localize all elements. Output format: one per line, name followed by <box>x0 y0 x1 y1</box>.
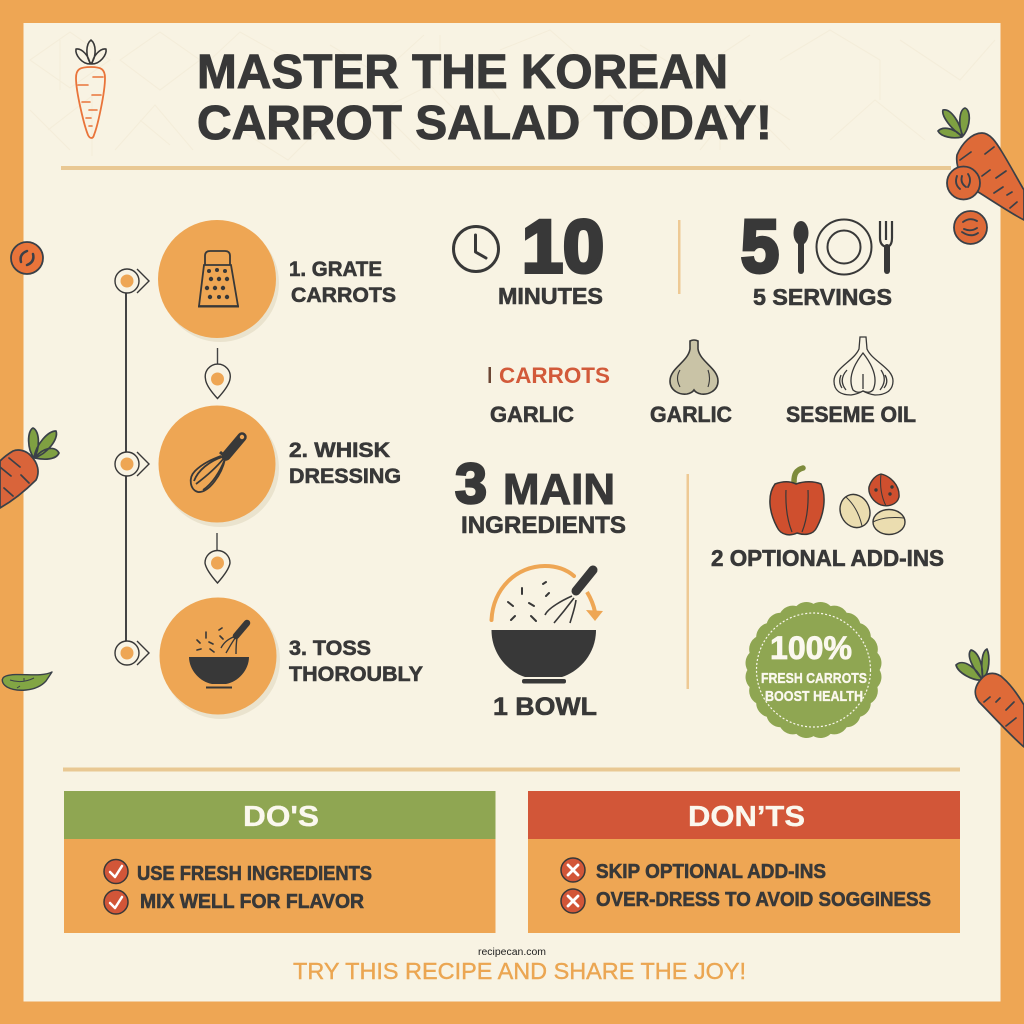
timeline line <box>125 292 127 642</box>
stat: 5 servings: 5 SERVINGS <box>753 284 892 310</box>
ingredient: filled garlic: GARLIC <box>650 402 732 427</box>
badge: 100% fresh carrots <box>746 602 881 738</box>
source credit: recipecan.com <box>478 947 546 958</box>
stat: 3 main ingredients: MAIN <box>503 465 615 514</box>
badge: 100% fresh carrots: FRESH CARROTS <box>761 671 867 687</box>
stat: 10 minutes: 10 <box>522 205 604 288</box>
heading: don'ts: DON’TS <box>688 801 805 833</box>
don't item 1: SKIP OPTIONAL ADD-INS <box>596 861 826 883</box>
icon: mixing bowl with whisk <box>492 566 603 721</box>
stat: 3 main ingredients: 3 <box>455 452 487 516</box>
icon: spoon, plate and fork <box>794 220 892 274</box>
icon: red bell pepper <box>770 468 824 535</box>
stat: 3 main ingredients <box>455 452 626 539</box>
step 1 label: CARROTS <box>291 284 396 307</box>
connector pin 2 <box>205 533 230 583</box>
timeline node 1 <box>115 269 149 293</box>
ingredient: carrots and garlic labels: GARLIC <box>490 402 574 427</box>
decoration: carrot left <box>0 428 59 508</box>
icon: nuts and seeds <box>835 474 905 534</box>
title <box>197 46 772 150</box>
timeline node 2 <box>115 452 149 476</box>
stat: 5 servings: 5 <box>741 205 779 288</box>
footer call to action: TRY THIS RECIPE AND SHARE THE JOY! <box>293 958 746 984</box>
decoration: carrot top right <box>938 108 1024 220</box>
title: CARROT SALAD TODAY! <box>197 97 772 150</box>
stat: 5 servings <box>741 205 892 310</box>
do item 1: USE FRESH INGREDIENTS <box>137 863 372 885</box>
vertical divider <box>678 220 680 294</box>
heading: do's: DO'S <box>243 801 319 833</box>
connector pin 1 <box>205 348 230 398</box>
panel: don'ts <box>528 791 960 933</box>
step 1 circle with grater icon <box>158 220 279 342</box>
step 3 label <box>289 637 423 686</box>
step 2 label: DRESSING <box>289 465 401 488</box>
decoration: carrot slice <box>947 166 980 200</box>
stat: 3 main ingredients: INGREDIENTS <box>461 512 626 539</box>
don't item 2: OVER-DRESS TO AVOID SOGGINESS <box>596 889 931 911</box>
stat: 10 minutes: MINUTES <box>498 283 603 309</box>
ingredient: sesame oil outlined garlic: SESEME OIL <box>786 402 916 427</box>
stat: 10 minutes <box>498 205 604 309</box>
decoration: carrot right <box>956 649 1024 747</box>
step 2 label: 2. WHISK <box>289 439 390 462</box>
icon: carrot outline <box>76 40 106 138</box>
ingredient: sesame oil outlined garlic <box>786 337 916 427</box>
step 1 label: 1. GRATE <box>289 258 382 281</box>
decoration: leaf left <box>2 672 52 690</box>
decoration: carrot slice <box>954 211 987 244</box>
optional add-ins label: 2 OPTIONAL ADD-INS <box>711 545 944 571</box>
title: MASTER THE KOREAN <box>197 46 728 99</box>
step 2 label <box>289 439 401 488</box>
panel: do's <box>64 791 496 933</box>
section divider <box>63 768 960 772</box>
icon: clock <box>454 226 498 272</box>
header divider <box>61 166 951 170</box>
timeline node 3 <box>115 641 149 665</box>
decoration: carrot slice left <box>11 242 43 274</box>
ingredient: carrots and garlic labels: CARROTS <box>499 363 610 388</box>
badge: 100% fresh carrots: 100% <box>770 630 852 666</box>
step 3 label: THOROUBLY <box>289 663 423 686</box>
step 3 label: 3. TOSS <box>289 637 371 660</box>
step 1 label <box>289 258 396 307</box>
badge: 100% fresh carrots: BOOST HEALTH <box>765 689 863 705</box>
step 2 circle with whisk icon <box>158 406 279 527</box>
ingredient: filled garlic <box>650 340 732 427</box>
step 3 circle with bowl icon <box>160 598 280 719</box>
vertical divider <box>686 474 689 689</box>
ingredient: carrots and garlic labels <box>488 363 610 427</box>
do item 2: MIX WELL FOR FLAVOR <box>140 891 365 913</box>
icon: mixing bowl with whisk: 1 BOWL <box>493 693 597 721</box>
